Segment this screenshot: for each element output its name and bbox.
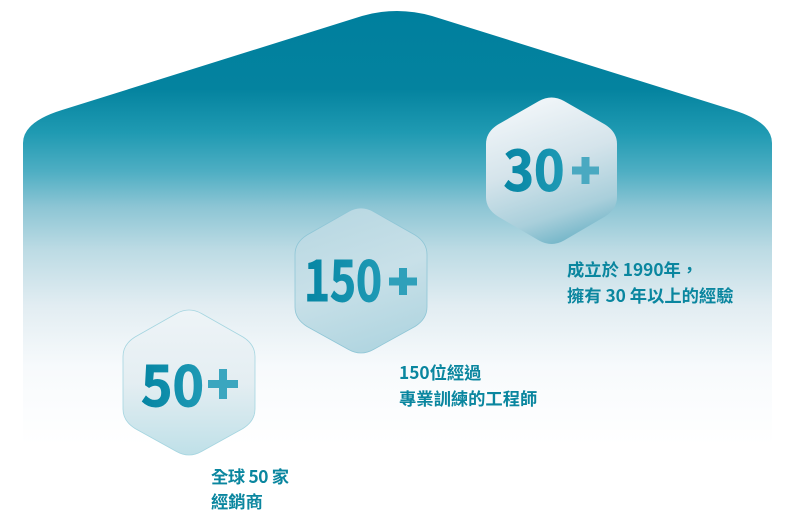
stat: 150+ engineers	[295, 208, 537, 410]
caption: 50+: 全球 50 家	[211, 463, 289, 488]
plus sign: 150+	[389, 268, 417, 295]
caption: 150+	[399, 359, 537, 410]
number: 150: 150	[304, 237, 382, 317]
caption: 30+: 擁有 30 年以上的經驗	[567, 282, 734, 307]
caption: 30+: 成立於 1990年，	[567, 256, 698, 281]
caption: 150+: 專業訓練的工程師	[399, 385, 537, 410]
hexagon: 150+	[295, 208, 427, 353]
number: 30: 30	[504, 126, 564, 206]
background house shape	[23, 11, 772, 445]
stat: 50+ distributors	[123, 310, 289, 513]
plus sign: 30+	[572, 157, 599, 184]
hexagon: 30+	[486, 98, 617, 244]
caption: 50+	[211, 463, 289, 513]
caption: 30+	[567, 256, 734, 307]
stat: 30+ years	[486, 98, 734, 307]
caption: 150+: 150位經過	[399, 359, 481, 384]
hexagon: 50+	[123, 310, 255, 455]
caption: 50+: 經銷商	[211, 488, 263, 513]
plus sign: 50+	[208, 369, 238, 399]
number: 50: 50	[141, 342, 204, 422]
